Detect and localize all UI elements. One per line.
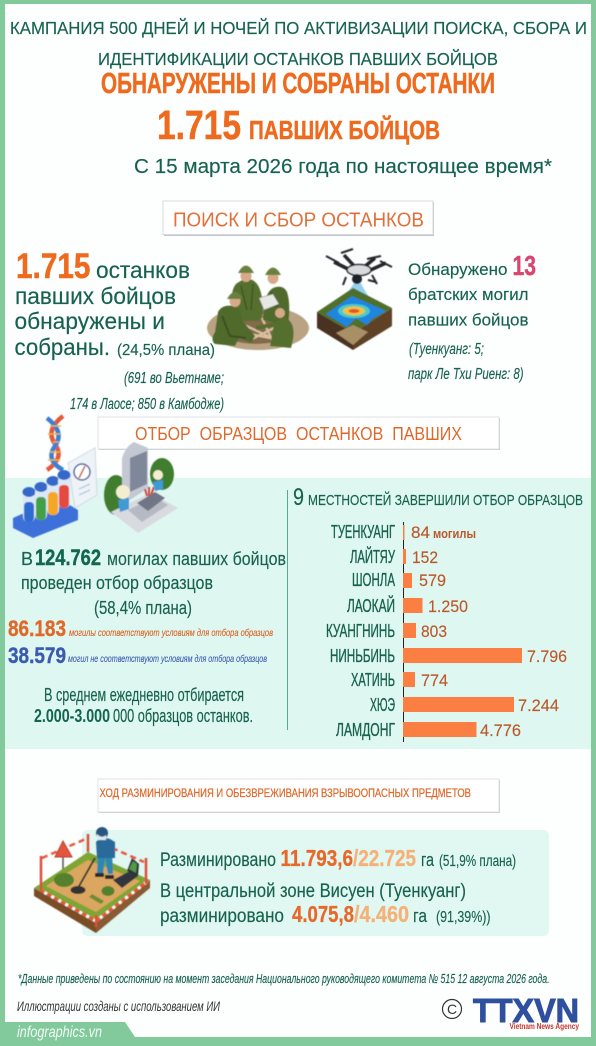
chart heading [293,484,583,511]
title [10,17,587,69]
text block: central zone demining: (91,39%)) [436,909,490,926]
section heading: demining [98,779,500,813]
date line: С 15 марта 2026 года по настоящее время* [134,156,552,178]
text block: graves sampled: могилах павших бойцов [107,549,286,569]
text block: central zone demining: га [413,906,428,926]
headline number: 1.715 [157,102,241,148]
stat: unsuitable graves: могил не соответствуют условиям для отбора образцов [68,653,267,665]
section heading: demining: ХОД РАЗМИНИРОВАНИЯ И ОБЕЗВРЕЖИВАНИЯ ВЗРЫВООПАСНЫХ ПРЕДМЕТОВ [100,788,471,800]
text block: demined area: Разминировано [160,850,276,871]
text block: demined area: 11.793,6 [280,845,353,871]
stat: unsuitable graves [8,643,267,668]
stat: suitable graves: могилы соответствуют условиям для отбора образцов [69,627,273,639]
icon: grave monument [104,442,178,533]
headline number [157,102,440,148]
text block: mass graves [408,250,536,383]
row: Ламдонг: ЛАМДОНГ [336,720,395,740]
text block: central zone demining: /4.460 [354,901,409,927]
row: Туенкуанг: ТУЕНКУАНГ [331,522,395,542]
title: ИДЕНТИФИКАЦИИ ОСТАНКОВ ПАВШИХ БОЙЦОВ [98,48,498,69]
row: Лаокай: ЛАОКАЙ [347,595,395,616]
row: Туенкуанг: 84 [411,523,430,542]
text block: mass graves: (Туенкуанг: 5; [409,341,484,358]
text block: daily average: В среднем ежедневно отбирается [44,685,244,705]
text block: remains found: (24,5% плана) [117,342,215,359]
row: Ниньбинь [330,646,567,666]
row: Ниньбинь: НИНЬБИНЬ [330,646,395,666]
copyright symbol [442,1000,462,1018]
text block: daily average [34,685,253,726]
text block: remains found: обнаружены и [14,308,165,334]
text block: mass graves: 13 [512,250,536,281]
text block: central zone demining: разминировано [160,906,284,927]
text block: graves sampled: 124.762 [35,545,101,570]
row: Хюэ: 7.244 [518,696,559,715]
text block: mass graves: павших бойцов [408,310,528,330]
text block: central zone demining [160,881,490,927]
text block: mass graves: парк Ле Тхи Риенг: 8) [408,366,524,383]
row: Хюэ [370,695,559,715]
row: Хюэ: ХЮЭ [370,695,395,715]
text block: demined area [160,845,516,871]
row: Шонла: ШОНЛА [352,570,395,590]
footer tab: infographics.vn [17,1024,102,1041]
text block: remains found: останков [96,257,190,283]
logo: TTXVN: TTXVN [473,992,579,1029]
row: Лаокай [347,595,468,616]
icon: drone scanning ground [317,249,392,350]
text block: graves sampled [21,545,286,618]
row: Ламдонг: 4.776 [480,721,521,740]
row: Хатинь: ХАТИНЬ [351,670,395,690]
text block: demined area: /22.725 [353,845,416,871]
credit note: Иллюстрации созданы с использованием ИИ [17,998,221,1014]
section heading: sampling [98,417,500,450]
text block: remains found: павших бойцов [15,283,176,309]
text block: remains found: 1.715 [16,247,90,286]
text block: remains found [14,247,224,413]
title: КАМПАНИЯ 500 ДНЕЙ И НОЧЕЙ ПО АКТИВИЗАЦИИ ПОИСКА, СБОРА И [10,17,587,38]
icon: soldiers excavating [207,266,309,350]
copyright symbol: C [447,1001,457,1017]
row: Хатинь: 774 [421,671,448,690]
section heading: search and collection: ПОИСК И СБОР ОСТАНКОВ [173,210,424,232]
bar chart: localities [326,522,567,742]
row: Лаокай: 1.250 [428,597,468,616]
text block: daily average: 2.000-3.000 [34,706,110,726]
stat: suitable graves: 86.183 [8,616,66,641]
text block: demined area: га [421,850,435,870]
stat: suitable graves [8,616,273,641]
row: Ниньбинь: 7.796 [527,647,567,666]
row: Куангнинь: 803 [421,622,447,641]
text block: demined area: (51,9% плана) [439,853,516,870]
stat: unsuitable graves: 38.579 [8,643,66,668]
headline number: ПАВШИХ БОЙЦОВ [249,115,440,145]
text block: graves sampled: В [21,549,33,569]
row: Ламдонг [336,720,521,740]
text block: graves sampled: (58,4% плана) [94,598,192,618]
text block: remains found: собраны. [14,334,110,360]
row: Лайтяу: ЛАЙТЯУ [350,546,395,567]
section heading: search and collection [163,201,434,236]
chart heading: 9 [293,484,304,511]
text block: graves sampled: проведен отбор образцов [21,573,213,593]
divider [286,490,288,730]
panel: sampling background [5,478,591,749]
row: Шонла: 579 [419,571,446,590]
row: Туенкуанг: могилы [433,526,476,541]
text block: mass graves: Обнаружено [408,260,508,279]
row: Лайтяу: 152 [412,548,438,567]
panel: demining [82,830,549,936]
logo: TTXVN: Vietnam News Agency [510,1022,579,1031]
section heading: sampling: ОТБОР ОБРАЗЦОВ ОСТАНКОВ ПАВШИХ [135,424,462,444]
icon: deminer with detector [34,827,150,933]
row: Куангнинь: КУАНГНИНЬ [326,621,395,641]
text block: central zone demining: В центральной зоне Висуен (Туенкуанг) [160,881,466,902]
text block: mass graves: братских могил [408,285,528,304]
text block: daily average: 000 образцов останков. [113,706,253,726]
footer tab [0,1022,135,1046]
text block: central zone demining: 4.075,8 [292,901,354,927]
icon: DNA and test tubes [13,416,97,538]
text block: remains found: (691 во Вьетнаме; [124,370,224,387]
text block: remains found: 174 в Лаосе; 850 в Камбодже) [70,396,224,413]
